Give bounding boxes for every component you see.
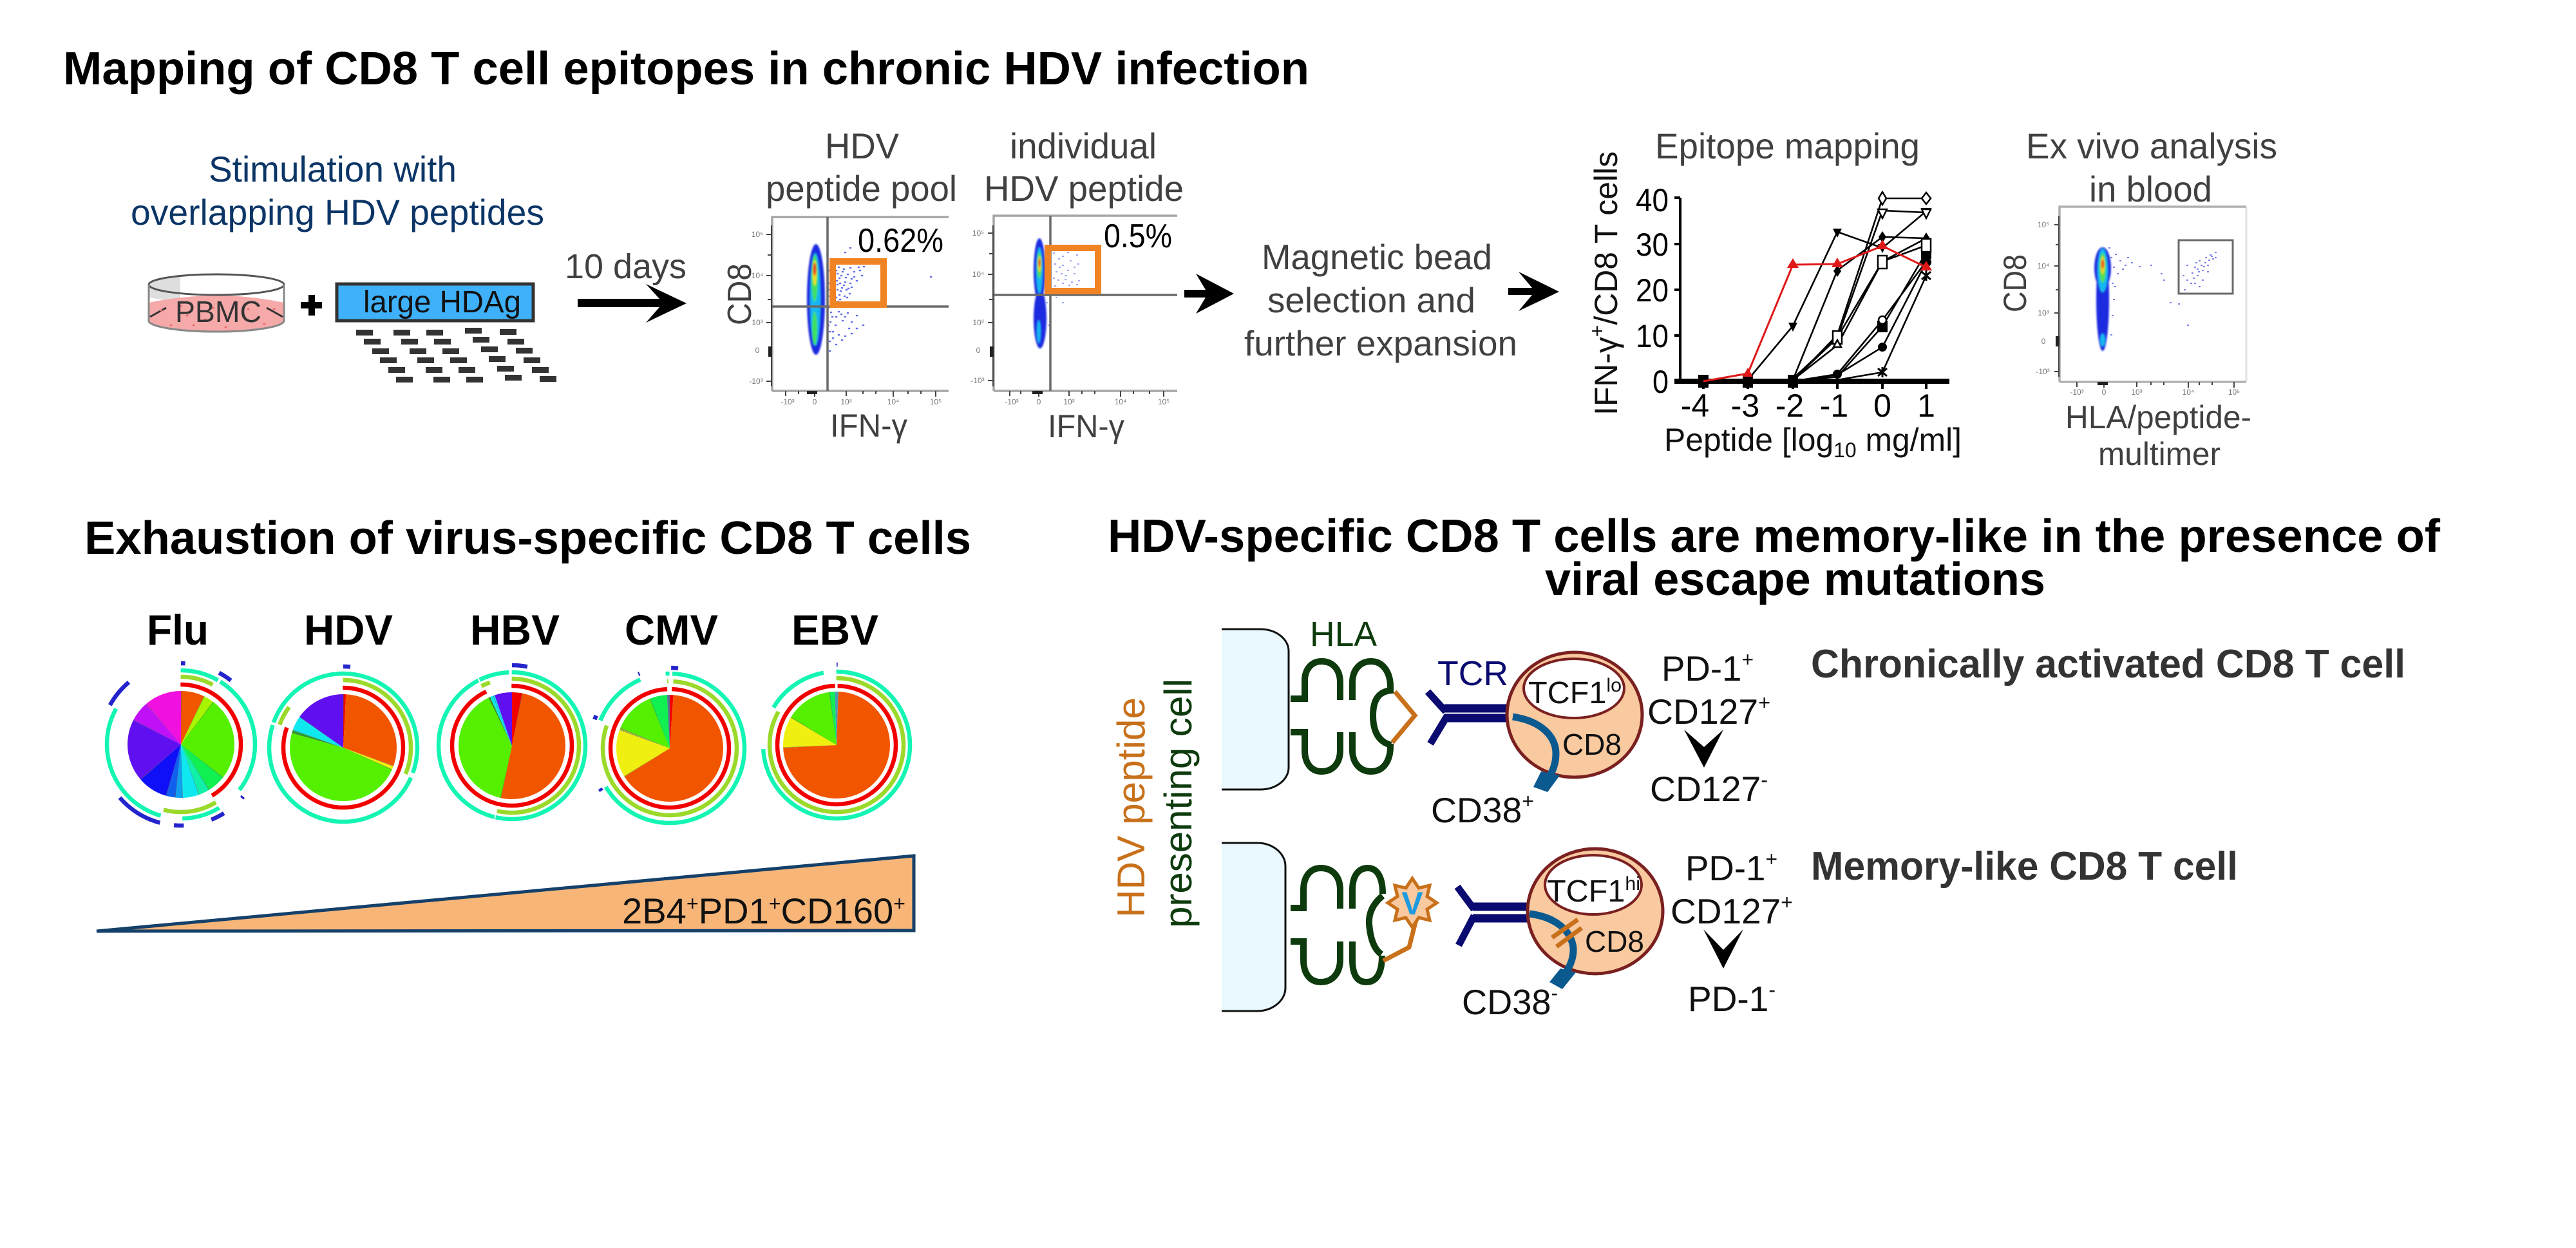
- flow plot: peptide pool: 10⁴: [887, 397, 899, 406]
- flow plot: peptide pool: 10⁵: [752, 230, 763, 239]
- marker transition: PD-1: -: [1768, 978, 1776, 1001]
- peptide with escape mutation: [1383, 878, 1437, 961]
- magnetic bead selection caption: selection and: [1267, 280, 1475, 320]
- arrow: CD38 blocked: [1530, 914, 1582, 989]
- flow plot: ex vivo multimer: 10⁵: [2038, 220, 2049, 229]
- gradient wedge: 2B4 PD1 CD160: 2B4: [622, 891, 687, 931]
- x axis label: mg/ml]: [1857, 422, 1962, 458]
- marker transition: CD127: PD-1: [1662, 648, 1742, 688]
- flow plot: ex vivo multimer: 0: [2041, 337, 2046, 346]
- gradient wedge: 2B4 PD1 CD160: [97, 856, 914, 931]
- stimulation caption: [131, 149, 544, 232]
- flow plot: ex vivo multimer: 0: [2102, 388, 2107, 397]
- T cell with nucleus: hi: [1625, 873, 1640, 894]
- HLA peptide multimer label: multimer: [2098, 436, 2221, 472]
- individual HDV peptide caption: individual: [1010, 126, 1157, 166]
- flow plot: individual peptide: 10⁴: [1115, 397, 1126, 406]
- flow plot: individual peptide: 10⁵: [1158, 397, 1170, 406]
- virus labels: Flu: [147, 606, 209, 654]
- row: chronically activated T cell interaction: [1222, 615, 2405, 830]
- CD8 axis label: CD8: [721, 263, 759, 325]
- line chart: epitope mapping: 10: [1636, 318, 1669, 354]
- SPICE pie: HDV: [262, 667, 424, 829]
- panel: epitope mapping workflow: [131, 126, 2277, 472]
- overlapping peptide dashes: [356, 328, 556, 383]
- flow plot: individual peptide: -10³: [971, 376, 985, 385]
- flow plot: ex vivo multimer: -10³: [2036, 367, 2050, 376]
- title: Mapping of CD8 T cell epitopes in chronic HDV infection: [63, 43, 1309, 95]
- CD38 positive label: CD38: [1431, 790, 1522, 830]
- HLA molecule: [1291, 868, 1383, 982]
- gradient wedge: 2B4 PD1 CD160: CD160: [781, 891, 893, 931]
- line chart: epitope mapping: -3: [1731, 388, 1759, 424]
- T cell with nucleus: TCF1: [1547, 875, 1624, 909]
- marker transition: PD-1: CD127: [1671, 891, 1781, 931]
- T cell with nucleus: CD8: [1585, 925, 1644, 958]
- flow plot: peptide pool: 0: [755, 346, 760, 355]
- presenting cell membrane: [1222, 843, 1285, 1011]
- flow plot: peptide pool: -10³: [749, 377, 763, 386]
- flow plot: peptide pool: -10³: [781, 397, 795, 406]
- flow plot: individual peptide: 0: [1037, 397, 1041, 406]
- vertical label: HDV peptide presenting cell: HDV peptide: [1110, 697, 1153, 918]
- marker transition: PD-1: PD-1: [1685, 848, 1766, 888]
- line chart: epitope mapping: 30: [1636, 227, 1669, 263]
- presenting cell membrane: [1222, 629, 1289, 789]
- marker transition: CD127: CD127: [1647, 692, 1757, 732]
- gradient wedge: 2B4 PD1 CD160: PD1: [699, 891, 769, 931]
- flow plot: individual peptide: -10³: [1005, 397, 1019, 406]
- HDV peptide pool caption: peptide pool: [766, 168, 957, 209]
- icon: PBMC culture dish: [149, 274, 284, 332]
- marker transition: CD127: +: [1758, 691, 1770, 714]
- heading: viral escape mutations: [1545, 554, 2045, 605]
- TCR label: TCR: [1437, 654, 1508, 693]
- flow plot: ex vivo multimer: [2036, 207, 2246, 397]
- flow plot: ex vivo multimer: -10³: [2070, 388, 2084, 397]
- flow plot: individual peptide: 10³: [1063, 397, 1075, 406]
- marker transition: PD-1: +: [1765, 847, 1777, 871]
- virus labels: HBV: [470, 606, 560, 654]
- y axis label: IFN-γ: [1588, 337, 1624, 415]
- HLA molecule: [1291, 661, 1394, 771]
- magnetic bead selection caption: [1244, 237, 1517, 363]
- IFN-gamma label: IFN-γ: [1048, 408, 1124, 444]
- T cell with nucleus: [1507, 652, 1642, 777]
- plus sign: [301, 295, 322, 316]
- stimulation caption: Stimulation with: [209, 149, 457, 189]
- line chart: epitope mapping: 1: [1917, 388, 1935, 424]
- flow plot: ex vivo multimer: 10³: [2038, 308, 2049, 317]
- row: memory-like T cell interaction: [1222, 843, 2238, 1022]
- panel: exhaustion of virus-specific CD8 T cells: [84, 513, 971, 931]
- T cell with nucleus: TCF1: [1528, 676, 1605, 710]
- arrow: to epitope mapping: [1508, 272, 1559, 311]
- flow plot: individual peptide: 10³: [972, 318, 984, 327]
- flow plot: peptide pool: 10³: [840, 397, 852, 406]
- CD38 negative label: CD38: [1462, 982, 1553, 1022]
- stimulation caption: overlapping HDV peptides: [131, 192, 544, 232]
- line chart: epitope mapping: -2: [1776, 388, 1804, 424]
- flow plot: peptide pool: 10³: [752, 318, 763, 327]
- flow plot: individual peptide: 10⁴: [972, 270, 984, 279]
- flow plot: individual peptide: 0.5%: [1104, 218, 1172, 255]
- y axis label: /CD8 T cells: [1588, 151, 1624, 325]
- label: chronically activated: Chronically activated CD8 T cell: [1811, 642, 2405, 686]
- HDV peptide pool caption: [766, 126, 957, 209]
- label: memory-like: Memory-like CD8 T cell: [1811, 844, 2238, 889]
- T cell receptor: [1457, 887, 1528, 945]
- magnetic bead selection caption: Magnetic bead: [1262, 237, 1492, 277]
- individual HDV peptide caption: [984, 126, 1184, 209]
- line chart: epitope mapping: -1: [1820, 388, 1848, 424]
- flow plot: ex vivo multimer: 10⁵: [2228, 388, 2240, 397]
- SPICE pie: EBV: [756, 665, 917, 826]
- flow plot: peptide pool: 0.62%: [858, 222, 943, 260]
- flow plot: peptide pool: 10⁵: [930, 397, 942, 406]
- flow plot: individual peptide: 10⁵: [972, 229, 984, 238]
- vertical label: HDV peptide presenting cell: presenting cell: [1157, 679, 1200, 928]
- marker transition: CD127: CD127: [1650, 769, 1760, 809]
- ex vivo analysis heading: in blood: [2089, 169, 2212, 209]
- ex vivo analysis heading: Ex vivo analysis: [2026, 126, 2277, 166]
- SPICE pie: HBV: [431, 665, 592, 826]
- flow plot: peptide pool: 0: [813, 397, 817, 406]
- CD8 axis label: CD8: [1997, 254, 2033, 312]
- marker transition: PD-1: PD-1: [1688, 979, 1768, 1019]
- heading: [1108, 511, 2441, 605]
- vertical label: HDV peptide presenting cell: [1110, 679, 1200, 928]
- marker transition: PD-1: [1671, 847, 1793, 1019]
- virus labels: CMV: [625, 606, 718, 654]
- virus labels: EBV: [791, 606, 878, 654]
- SPICE pie: Flu: [100, 663, 262, 826]
- marker transition: CD127: +: [1741, 648, 1754, 671]
- line chart: epitope mapping: 20: [1636, 272, 1669, 308]
- T cell with nucleus: CD8: [1562, 728, 1622, 761]
- line chart: epitope mapping: -4: [1681, 388, 1709, 424]
- gradient wedge: 2B4 PD1 CD160: +: [687, 892, 699, 915]
- virus labels: [147, 606, 878, 654]
- arrow: to flow plots: [578, 284, 687, 323]
- flow plot: individual peptide: 0: [976, 346, 981, 355]
- T cell receptor: [1428, 692, 1508, 744]
- T cell with nucleus: [1528, 849, 1663, 974]
- HDV peptide pool caption: HDV: [825, 126, 900, 166]
- marker transition: CD127: -: [1761, 768, 1768, 791]
- magnetic bead selection caption: further expansion: [1244, 323, 1517, 363]
- panel: memory-like CD8 T cells: [1108, 511, 2441, 1022]
- large HDAg box: large HDAg: [363, 285, 521, 319]
- epitope mapping heading: Epitope mapping: [1655, 126, 1920, 166]
- line chart: epitope mapping: 40: [1636, 182, 1669, 218]
- arrow: CD38 up: [1513, 717, 1560, 792]
- marker transition: PD-1: +: [1781, 891, 1793, 914]
- virus labels: HDV: [304, 606, 393, 654]
- line chart: epitope mapping: 0: [1653, 364, 1669, 400]
- ex vivo analysis heading: [2026, 126, 2277, 209]
- heading: HDV-specific CD8 T cells are memory-like in the presence of: [1108, 511, 2441, 562]
- 10 days label: 10 days: [565, 247, 687, 286]
- flow plot: peptide pool: [749, 217, 949, 406]
- line chart: epitope mapping: 0: [1873, 388, 1891, 424]
- SPICE pie: CMV: [589, 668, 750, 829]
- IFN-gamma label: IFN-γ: [830, 408, 907, 444]
- HLA label: HLA: [1310, 615, 1377, 654]
- x axis label: 10: [1833, 439, 1857, 462]
- flow plot: ex vivo multimer: 10³: [2131, 388, 2143, 397]
- gradient wedge: 2B4 PD1 CD160: +: [769, 892, 781, 915]
- individual HDV peptide caption: HDV peptide: [984, 168, 1184, 209]
- arrow: to bead selection: [1184, 274, 1234, 314]
- heading: Exhaustion of virus-specific CD8 T cells: [84, 513, 971, 564]
- gradient wedge: 2B4 PD1 CD160: +: [893, 892, 905, 915]
- T cell with nucleus: lo: [1606, 675, 1622, 696]
- CD38 negative label: -: [1551, 981, 1558, 1005]
- flow plot: ex vivo multimer: 10⁴: [2183, 388, 2194, 397]
- peptide: [1392, 692, 1415, 742]
- line chart: epitope mapping: [1636, 182, 1949, 424]
- HLA peptide multimer label: HLA/peptide-: [2065, 399, 2251, 435]
- peptide with escape mutation: V: [1401, 885, 1423, 922]
- flow plot: individual peptide: [971, 216, 1177, 406]
- x axis label: Peptide [log: [1664, 422, 1834, 458]
- y axis label: +: [1586, 325, 1609, 337]
- flow plot: ex vivo multimer: 10⁴: [2038, 261, 2049, 270]
- flow plot: peptide pool: 10⁴: [752, 271, 763, 280]
- CD38 positive label: +: [1522, 789, 1534, 813]
- marker transition: CD127: [1647, 648, 1770, 809]
- icon: PBMC culture dish: PBMC: [175, 295, 261, 328]
- HLA peptide multimer label: [2065, 399, 2251, 472]
